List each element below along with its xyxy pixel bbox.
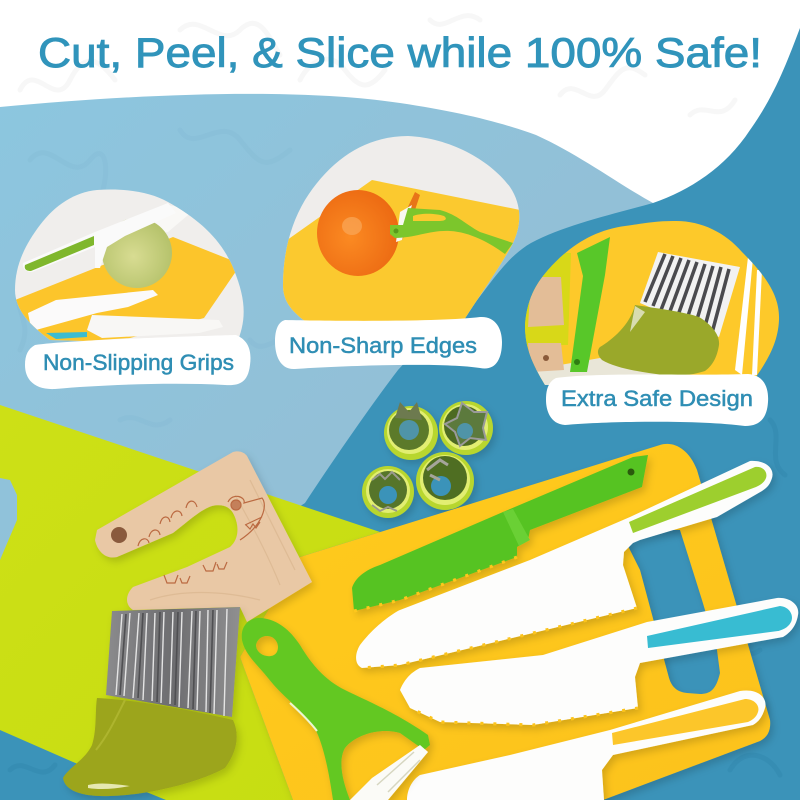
white knife with lime handle — [356, 461, 773, 668]
wooden crocodile knife — [95, 451, 312, 622]
lower knife two — [87, 315, 223, 338]
green serrated knife — [352, 455, 648, 611]
peeler — [390, 208, 513, 254]
cutter: bottom right — [416, 452, 474, 510]
panel: extra safe design photo — [520, 215, 785, 390]
cutter: top right — [439, 401, 493, 455]
lime cutting board — [0, 405, 380, 800]
wavy steel cutter — [63, 607, 240, 796]
title: Cut, Peel, & Slice while 100% Safe! — [38, 29, 762, 76]
label: non-sharp edges: Non-Sharp Edges — [289, 333, 477, 358]
apple — [102, 218, 172, 288]
olive cutter handle — [598, 305, 719, 376]
peel — [400, 192, 420, 240]
knife blade behind apple — [155, 206, 188, 232]
white rails — [735, 257, 753, 375]
cutter: bottom left — [362, 466, 414, 518]
peeler blade — [350, 745, 428, 800]
yellow board — [15, 237, 241, 345]
lime handle grip — [629, 467, 766, 533]
wavy cutter — [640, 252, 740, 337]
white knife with blue handle — [400, 598, 798, 725]
label: non-slipping grips — [25, 335, 250, 389]
wood knife pieces — [528, 277, 564, 327]
cutter: top left — [384, 402, 438, 460]
cookie cutters — [362, 401, 493, 518]
crocodile engraving — [138, 496, 264, 583]
yellow board — [280, 180, 525, 330]
green knife — [570, 237, 610, 372]
orange — [317, 190, 399, 276]
teal handle — [46, 332, 87, 339]
panel: non-slipping grips photo — [15, 190, 244, 341]
olive handle — [63, 698, 237, 796]
label: non-slipping grips: Non-Slipping Grips — [43, 350, 234, 375]
blue handle grip — [647, 606, 792, 648]
yellow handle grip — [612, 699, 758, 745]
white knife with yellow handle — [407, 690, 766, 800]
label: extra safe design — [546, 374, 768, 426]
label: non-sharp edges — [275, 317, 502, 369]
wood grain — [150, 480, 295, 600]
steel ridges — [116, 609, 227, 716]
yellow cutting board — [240, 444, 770, 800]
green peeler — [242, 618, 430, 800]
panel: non-sharp edges photo — [283, 136, 520, 321]
label: extra safe design: Extra Safe Design — [561, 386, 753, 411]
lower knife one — [28, 290, 158, 330]
knife handle over apple — [23, 203, 176, 272]
